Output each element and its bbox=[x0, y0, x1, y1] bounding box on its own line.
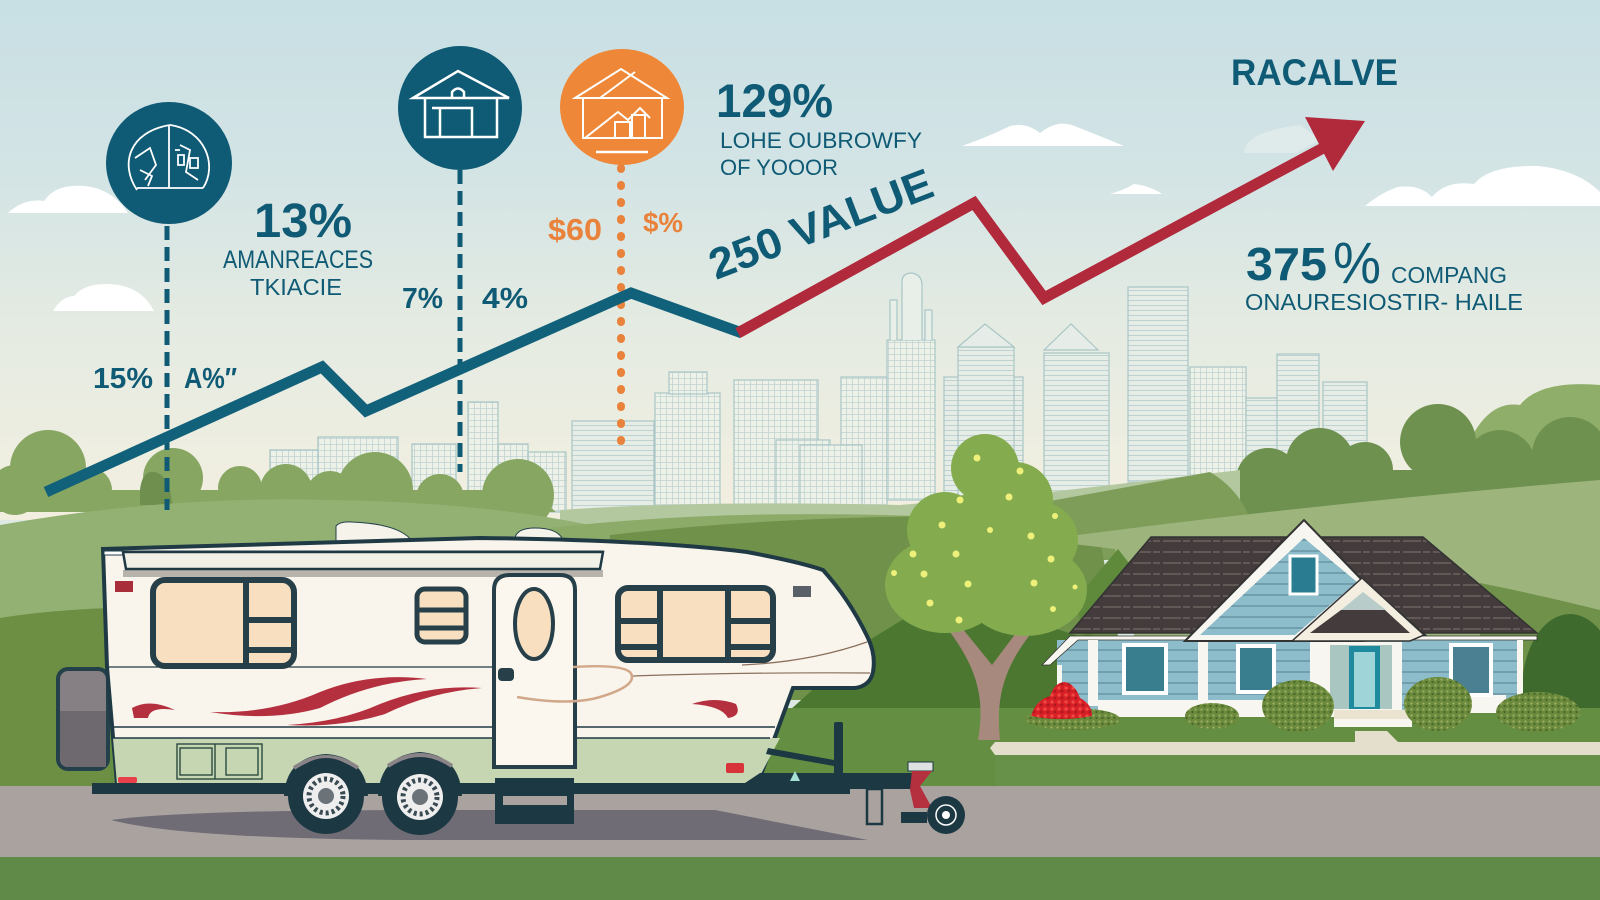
arrow label: RACALVE bbox=[1231, 52, 1398, 93]
clouds bbox=[8, 124, 1600, 311]
fifth-wheel trailer bbox=[58, 522, 965, 835]
gable window bbox=[1290, 556, 1317, 594]
roof bbox=[1070, 537, 1537, 633]
line chart: blue trend bbox=[46, 168, 742, 510]
trim and porch base bbox=[1042, 636, 1537, 665]
callout: 129%: 129% bbox=[716, 74, 833, 127]
callout: 7% and 4%: 7% bbox=[402, 283, 443, 315]
frame and hitch bbox=[92, 722, 912, 824]
awning bbox=[123, 570, 603, 577]
storage hatches bbox=[177, 744, 262, 779]
rotated label: 250 value: 250 VALUE bbox=[702, 160, 940, 289]
callout: 129% bbox=[716, 74, 922, 180]
callout: 15%: A%″ bbox=[184, 363, 237, 395]
callout: 13%: TKIACIE bbox=[250, 274, 342, 300]
window one bbox=[153, 580, 294, 666]
red flowers bbox=[1031, 682, 1092, 719]
house bbox=[1026, 520, 1580, 743]
sky background bbox=[0, 0, 1600, 520]
callout: 375% bbox=[1245, 231, 1523, 315]
wheels bbox=[284, 752, 462, 835]
callout: 129%: OF YOOOR bbox=[720, 155, 838, 180]
shrubs bbox=[1026, 677, 1580, 732]
callout: 7% and 4%: 4% bbox=[482, 283, 528, 315]
callout: orange values bbox=[548, 207, 683, 247]
callout: 129%: LOHE OUBROWFY bbox=[720, 128, 922, 153]
callout: orange values: $% bbox=[643, 207, 683, 238]
callout: 15% bbox=[93, 363, 237, 395]
pin icon: orange house bbox=[560, 49, 684, 165]
red growth arrow bbox=[738, 117, 1365, 333]
roof vents bbox=[336, 522, 412, 541]
window three bbox=[618, 588, 773, 660]
callout: 375%: % bbox=[1333, 231, 1381, 296]
decals bbox=[132, 677, 738, 726]
callout: orange values: $60 bbox=[548, 212, 602, 247]
main gable bbox=[1185, 520, 1425, 641]
callout: 375%: ONAURESIOSTIR- HAILE bbox=[1245, 289, 1523, 315]
lower panel bbox=[113, 738, 780, 784]
windows bbox=[1124, 645, 1491, 695]
pin icon: globe bbox=[106, 102, 232, 224]
blue segment bbox=[46, 293, 742, 492]
markers bbox=[790, 771, 800, 781]
callout: 15%: 15% bbox=[93, 363, 153, 395]
jack and hitch wheel bbox=[867, 762, 965, 834]
callout: 375%: 375 bbox=[1246, 238, 1327, 290]
pin icon: garage house bbox=[398, 46, 522, 170]
entry bbox=[1310, 642, 1402, 710]
door bbox=[494, 575, 575, 767]
callout: 13% bbox=[223, 195, 373, 300]
callout: 13%: 13% bbox=[254, 195, 352, 248]
window two bbox=[417, 589, 466, 642]
small gable bbox=[1292, 578, 1424, 641]
callout: 375%: COMPANG bbox=[1391, 262, 1507, 288]
dashed pin lines bbox=[167, 170, 460, 510]
background hills and bushes bbox=[0, 384, 1600, 766]
tree bbox=[885, 434, 1087, 740]
tan stripe bbox=[517, 666, 632, 702]
trailer shadow bbox=[111, 810, 868, 840]
callout: 7% and 4% bbox=[402, 283, 528, 315]
porch steps bbox=[1334, 710, 1412, 719]
walls bbox=[1057, 640, 1523, 712]
city skyline bbox=[270, 273, 1367, 512]
rear spare tire bbox=[58, 669, 108, 769]
callout: 13%: AMANREACES bbox=[223, 246, 373, 274]
body shell bbox=[103, 538, 874, 784]
vent bbox=[793, 586, 811, 597]
dotted orange pin line bbox=[617, 168, 625, 450]
lawn, sidewalk, road bbox=[0, 640, 1600, 900]
